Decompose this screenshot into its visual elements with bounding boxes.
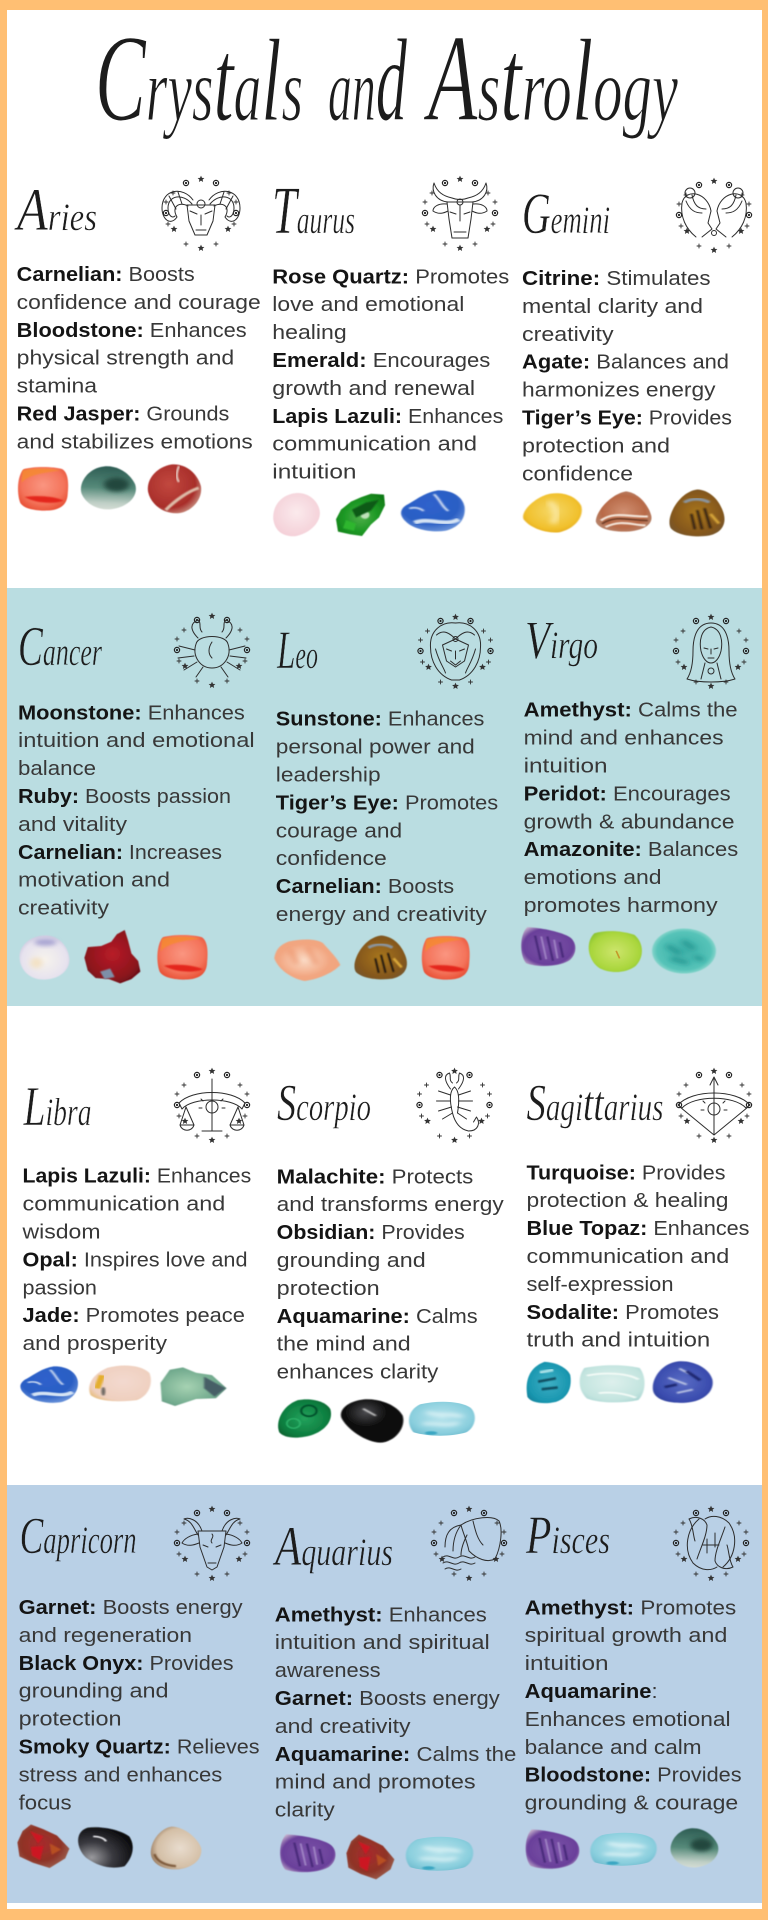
text block: Scorpio crystals: grounding and [277, 1250, 426, 1272]
heading: Aquarius: Aquarius [272, 1516, 393, 1578]
text block: Libra crystals: Lapis Lazuli: Enhances [22, 1166, 251, 1188]
panel: Leo [274, 614, 498, 981]
text block: Aries crystals: confidence and courage [17, 292, 261, 314]
text block: Libra crystals: Opal: Inspires love and [22, 1249, 247, 1271]
gem: aquamarine [406, 1837, 473, 1871]
gem: moonstone [19, 935, 69, 980]
panel: Sagittarius [526, 1068, 752, 1403]
text block: Pisces crystals: balance and calm [525, 1737, 702, 1759]
text block: Aquarius crystals: and creativity [275, 1716, 410, 1738]
text block: Aquarius crystals: Aquamarine: Calms the [275, 1744, 516, 1766]
text block: Leo crystals: Tiger’s Eye: Promotes [276, 792, 498, 814]
text block: Aries crystals: stamina [17, 376, 98, 398]
text block: Aries crystals: Red Jasper: Grounds [17, 404, 229, 426]
icon: goat [174, 1506, 250, 1581]
icon: twins [676, 178, 752, 253]
panel: Libra [20, 1068, 251, 1406]
gem: sodalite [653, 1361, 713, 1403]
text block: Pisces crystals: grounding & courage [525, 1793, 738, 1815]
text block: Taurus crystals: healing [272, 322, 347, 344]
heading: Libra: Libra [23, 1076, 92, 1138]
gem: jade [160, 1367, 226, 1406]
text block: Sagittarius crystals: communication and [526, 1246, 729, 1268]
title: Crystals [95, 10, 303, 147]
panel: Aquarius [272, 1506, 516, 1879]
text block: Aquarius crystals: clarity [275, 1800, 335, 1822]
gem: agate [596, 491, 652, 532]
text block: Libra crystals: Jade: Promotes peace [22, 1305, 245, 1327]
text block: Aquarius crystals [275, 1604, 516, 1822]
text block: Pisces crystals: intuition [525, 1653, 609, 1675]
icon: bull [422, 176, 498, 251]
text block: Virgo crystals: emotions and [524, 867, 662, 889]
gem: smoky quartz [151, 1827, 201, 1869]
text block: Capricorn crystals: focus [19, 1792, 72, 1814]
icon: maiden [673, 614, 749, 689]
text block: Taurus crystals: growth and renewal [272, 378, 475, 400]
text block: Scorpio crystals: enhances clarity [277, 1362, 438, 1384]
text block: Gemini crystals: mental clarity and [522, 296, 703, 318]
gem: amethyst [280, 1834, 335, 1872]
panel: Scorpio [277, 1068, 504, 1443]
gem: aquamarine [590, 1833, 657, 1866]
text block: Pisces crystals: Enhances emotional [525, 1709, 731, 1731]
heading: Leo: Leo [276, 620, 318, 680]
heading: Aries: Aries [14, 177, 97, 243]
text block: Capricorn crystals: Smoky Quartz: Relieves [19, 1736, 260, 1758]
gem: amazonite [652, 928, 716, 974]
text block: Taurus crystals: love and emotional [272, 294, 464, 316]
text block: Capricorn crystals: Black Onyx: Provides [19, 1653, 234, 1675]
band: second row background [7, 588, 762, 1006]
text block: Cancer crystals: creativity [18, 898, 109, 920]
panel: Taurus [272, 172, 509, 536]
text block: Gemini crystals: Agate: Balances and [522, 352, 729, 374]
text block: Leo crystals: confidence [276, 848, 387, 870]
gem: amethyst [526, 1829, 579, 1869]
text block: Sagittarius crystals: self-expression [526, 1274, 674, 1296]
heading: Taurus: Taurus [272, 172, 355, 248]
gem: black onyx [78, 1827, 133, 1868]
text block: Capricorn crystals: grounding and [19, 1681, 169, 1703]
text block: Cancer crystals: Carnelian: Increases [18, 842, 222, 864]
gem: carnelian [157, 935, 208, 980]
text block: Leo crystals: personal power and [276, 737, 475, 759]
text block: Libra crystals [21, 1166, 251, 1355]
title: Astrology [423, 10, 678, 147]
panel: Aries [14, 176, 261, 513]
text block: Leo crystals [276, 709, 498, 926]
panel: Virgo [521, 610, 749, 974]
text block: Virgo crystals: promotes harmony [524, 895, 718, 917]
text block: Gemini crystals [522, 268, 732, 485]
text block: Aries crystals: Carnelian: Boosts [17, 264, 195, 286]
gem: obsidian [341, 1399, 403, 1443]
gem: bloodstone [81, 466, 136, 509]
text block: Sagittarius crystals: truth and intuition [526, 1330, 710, 1352]
text block: Scorpio crystals: Obsidian: Provides [277, 1222, 465, 1244]
text block: Capricorn crystals: Garnet: Boosts energy [19, 1597, 243, 1619]
panel: Capricorn [17, 1506, 260, 1869]
icon: bow and arrow [676, 1068, 752, 1143]
text block: Virgo crystals: Amethyst: Calms the [524, 700, 738, 722]
gem: garnet [17, 1824, 69, 1868]
heading: Capricorn: Capricorn [20, 1508, 137, 1565]
text block: Aquarius crystals: Garnet: Boosts energy [275, 1688, 500, 1710]
text block: Gemini crystals: creativity [522, 324, 614, 346]
text block: Virgo crystals: mind and enhances [524, 728, 724, 750]
text block: Leo crystals: Sunstone: Enhances [276, 709, 484, 731]
gem: carnelian [422, 936, 470, 980]
gem: aquamarine [409, 1402, 475, 1436]
icon: scorpion [417, 1068, 492, 1143]
text block: Taurus crystals: intuition [272, 462, 356, 484]
text block: Scorpio crystals: the mind and [277, 1334, 411, 1356]
heading: Virgo: Virgo [525, 610, 598, 670]
gem: lapis lazuli [401, 490, 465, 531]
heading: Cancer: Cancer [18, 616, 103, 678]
icon: lion [418, 614, 493, 689]
text block: Sagittarius crystals: Sodalite: Promotes [526, 1302, 719, 1324]
text block: Cancer crystals: balance [18, 758, 96, 780]
text block: Aquarius crystals: awareness [275, 1660, 381, 1682]
icon: ram [162, 176, 240, 251]
text block: Aquarius crystals: Amethyst: Enhances [275, 1604, 487, 1626]
text block: Libra crystals: passion [22, 1277, 97, 1299]
text block: Libra crystals: wisdom [21, 1222, 101, 1244]
text block: Aquarius crystals: mind and promotes [275, 1772, 476, 1794]
panel: Gemini [522, 178, 752, 536]
gem: carnelian [18, 467, 68, 511]
gem: sunstone [274, 939, 340, 981]
text block: Capricorn crystals: stress and enhances [19, 1764, 222, 1786]
text block: Leo crystals: courage and [276, 820, 402, 842]
text block: Cancer crystals: and vitality [18, 814, 127, 836]
text block: Capricorn crystals: protection [19, 1709, 122, 1731]
gem: emerald [336, 494, 385, 536]
panel: Cancer [18, 613, 255, 983]
text block: Scorpio crystals: Malachite: Protects [277, 1166, 473, 1188]
text block: Cancer crystals: intuition and emotional [18, 730, 255, 752]
text block: Gemini crystals: Citrine: Stimulates [522, 268, 711, 290]
text block: Scorpio crystals: Aquamarine: Calms [277, 1306, 478, 1328]
text block: Cancer crystals: Ruby: Boosts passion [18, 786, 231, 808]
gem: blue topaz [580, 1365, 645, 1402]
gem: bloodstone [671, 1828, 718, 1867]
heading: Scorpio: Scorpio [277, 1075, 371, 1132]
text block: Leo crystals: energy and creativity [276, 904, 487, 926]
text block: Pisces crystals: Amethyst: Promotes [525, 1597, 736, 1619]
text block: Capricorn crystals [19, 1597, 260, 1814]
text block: Sagittarius crystals: Turquoise: Provides [526, 1162, 726, 1184]
gem: turquoise [527, 1362, 571, 1403]
text block: Aquarius crystals: intuition and spiritual [275, 1632, 490, 1654]
text block: Virgo crystals: intuition [524, 756, 608, 778]
text block: Gemini crystals: protection and [522, 435, 670, 457]
text block: Sagittarius crystals: protection & healing [526, 1190, 728, 1212]
text block: Taurus crystals: communication and [272, 434, 477, 456]
text block: Gemini crystals: confidence [522, 463, 633, 485]
gem: opal [89, 1365, 151, 1401]
gem: malachite [278, 1399, 331, 1438]
title: and [328, 15, 408, 146]
gem: citrine [523, 493, 582, 532]
gem: amethyst [521, 927, 575, 966]
text block: Taurus crystals: Emerald: Encourages [272, 350, 490, 372]
icon: fish [673, 1506, 749, 1581]
text block: Taurus crystals: Rose Quartz: Promotes [272, 266, 509, 288]
text block: Virgo crystals: Amazonite: Balances [524, 839, 738, 861]
text block: Pisces crystals: Aquamarine : [525, 1681, 658, 1703]
gem: ruby [84, 930, 140, 983]
title [95, 10, 678, 147]
gem: garnet [346, 1834, 394, 1879]
text block: Taurus crystals: Lapis Lazuli: Enhances [272, 406, 503, 428]
text block: Gemini crystals: harmonizes energy [522, 380, 716, 402]
text block: Virgo crystals [524, 700, 738, 917]
text block: Capricorn crystals: and regeneration [19, 1625, 192, 1647]
heading: Pisces: Pisces [525, 1505, 610, 1565]
heading: Gemini: Gemini [522, 181, 610, 246]
heading: Sagittarius: Sagittarius [526, 1075, 664, 1132]
gem: red jasper [148, 464, 201, 513]
text block: Taurus crystals [272, 266, 509, 484]
icon: scales [174, 1068, 250, 1143]
text block: Pisces crystals: Bloodstone: Provides [525, 1765, 742, 1787]
icon: water bearer [431, 1506, 507, 1581]
gem: rose quartz [273, 493, 320, 536]
text block: Cancer crystals [18, 702, 255, 920]
text block: Libra crystals: and prosperity [22, 1333, 167, 1355]
text block: Sagittarius crystals: Blue Topaz: Enhances [526, 1218, 750, 1240]
text block: Aries crystals: Bloodstone: Enhances [17, 320, 247, 342]
text block: Leo crystals: Carnelian: Boosts [276, 876, 454, 898]
text block: Gemini crystals: Tiger’s Eye: Provides [522, 408, 732, 430]
band: fourth row background [7, 1485, 762, 1903]
gem: lapis lazuli [20, 1366, 78, 1403]
text block: Aries crystals: and stabilizes emotions [17, 431, 253, 453]
text block: Cancer crystals: Moonstone: Enhances [18, 702, 245, 724]
text block: Aries crystals [17, 264, 261, 453]
text block: Libra crystals: communication and [22, 1194, 225, 1216]
text block: Aries crystals: physical strength and [17, 348, 234, 370]
text block: Virgo crystals: Peridot: Encourages [524, 783, 731, 805]
text block: Leo crystals: leadership [276, 764, 381, 786]
panel: Pisces [525, 1505, 749, 1869]
text block: Scorpio crystals [277, 1166, 504, 1384]
text block: Scorpio crystals: and transforms energy [277, 1194, 504, 1216]
gem: peridot [589, 931, 642, 972]
gem: tiger's eye [354, 935, 407, 979]
text block: Pisces crystals [525, 1597, 742, 1815]
text block: Cancer crystals: motivation and [18, 870, 170, 892]
text block: Sagittarius crystals [526, 1162, 750, 1352]
text block: Pisces crystals: spiritual growth and [525, 1625, 727, 1647]
icon: crab [174, 613, 250, 688]
text block: Scorpio crystals: protection [277, 1278, 380, 1300]
text block: Virgo crystals: growth & abundance [524, 811, 735, 833]
gem: tiger's eye [669, 489, 725, 536]
